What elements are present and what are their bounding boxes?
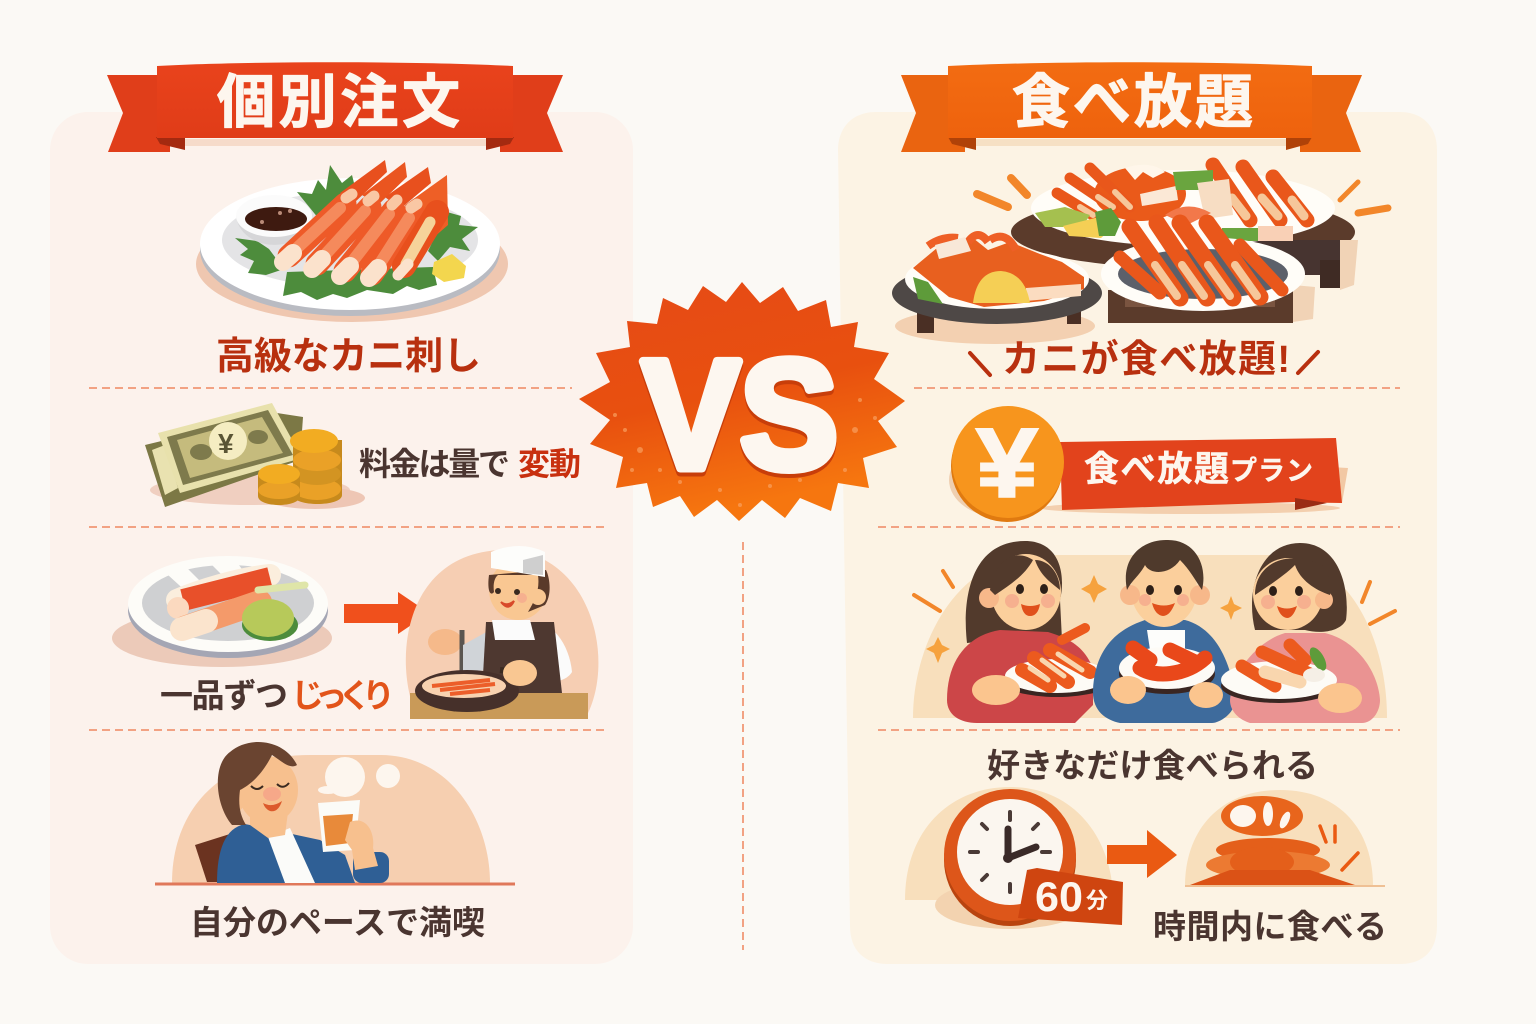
label: price varies by quantity [359, 446, 581, 482]
person: man centre [1093, 540, 1235, 723]
arrow [344, 592, 429, 634]
back table [1011, 196, 1358, 290]
label: all you can eat crab: カニが食べ放題! [1002, 339, 1290, 381]
crab centre [1094, 165, 1186, 221]
glass [318, 800, 360, 852]
VS starburst badge [579, 282, 905, 521]
label: luxury crab sashimi: 高級なカニ刺し [216, 336, 481, 378]
chef [406, 546, 598, 719]
60 minute tag [1018, 868, 1123, 925]
illustration: banknotes and coins [145, 403, 365, 509]
thought bubbles [318, 757, 400, 797]
plan label: プラン [1230, 456, 1313, 486]
label: one dish at a time: 一品ずつ [160, 677, 288, 714]
panel: individual order background [50, 112, 633, 964]
illustration: crab in time [1185, 790, 1385, 886]
label: enjoy at your own pace: 自分のペースで満喫 [190, 904, 485, 941]
plan label [1084, 450, 1313, 489]
illustration: banknotes and coins: ¥ [218, 428, 234, 459]
label: one dish at a time [160, 677, 395, 714]
person: woman right [1221, 543, 1380, 723]
panel: all-you-can-eat background [838, 112, 1437, 964]
illustration: three people holding plates [913, 540, 1395, 723]
illustration: man relaxing with a drink [155, 742, 515, 884]
crab legs [283, 160, 448, 278]
VS text: VS [642, 328, 838, 501]
icon: yen plan ribbon [949, 406, 1348, 522]
illustration: crab sashimi plate [196, 160, 508, 322]
illustration: feast on platters [892, 165, 1388, 344]
label: eat as much as you like: 好きなだけ食べられる [987, 747, 1318, 784]
label: price varies by quantity: 料金は量で [359, 446, 510, 482]
60 minute tag: 分 [1086, 888, 1108, 913]
VS text shadow: VS [642, 332, 838, 505]
right ribbon banner [901, 62, 1362, 152]
label: eat within time limit: 時間内に食べる [1153, 908, 1387, 945]
yen symbol: ¥ [976, 408, 1039, 518]
label: one dish at a time: じっくり [291, 677, 395, 714]
60 minute tag: 60 [1035, 873, 1083, 920]
plan label: 食べ放題 [1084, 450, 1229, 489]
plate [112, 556, 332, 667]
title: individual order: 個別注文 [217, 70, 460, 135]
title: all you can eat: 食べ放題 [1012, 70, 1253, 135]
label: price varies by quantity: 変動 [518, 446, 581, 482]
left ribbon banner [107, 62, 563, 152]
illustration: 60 minute clock [905, 787, 1123, 929]
person: woman left [947, 541, 1112, 723]
front left plate [892, 235, 1102, 344]
illustration: crab plate to chef [112, 546, 598, 719]
coin stacks [258, 429, 342, 505]
front right plate [1101, 223, 1315, 323]
arrow: time to crab [1107, 830, 1177, 878]
sauce dish [236, 195, 312, 245]
